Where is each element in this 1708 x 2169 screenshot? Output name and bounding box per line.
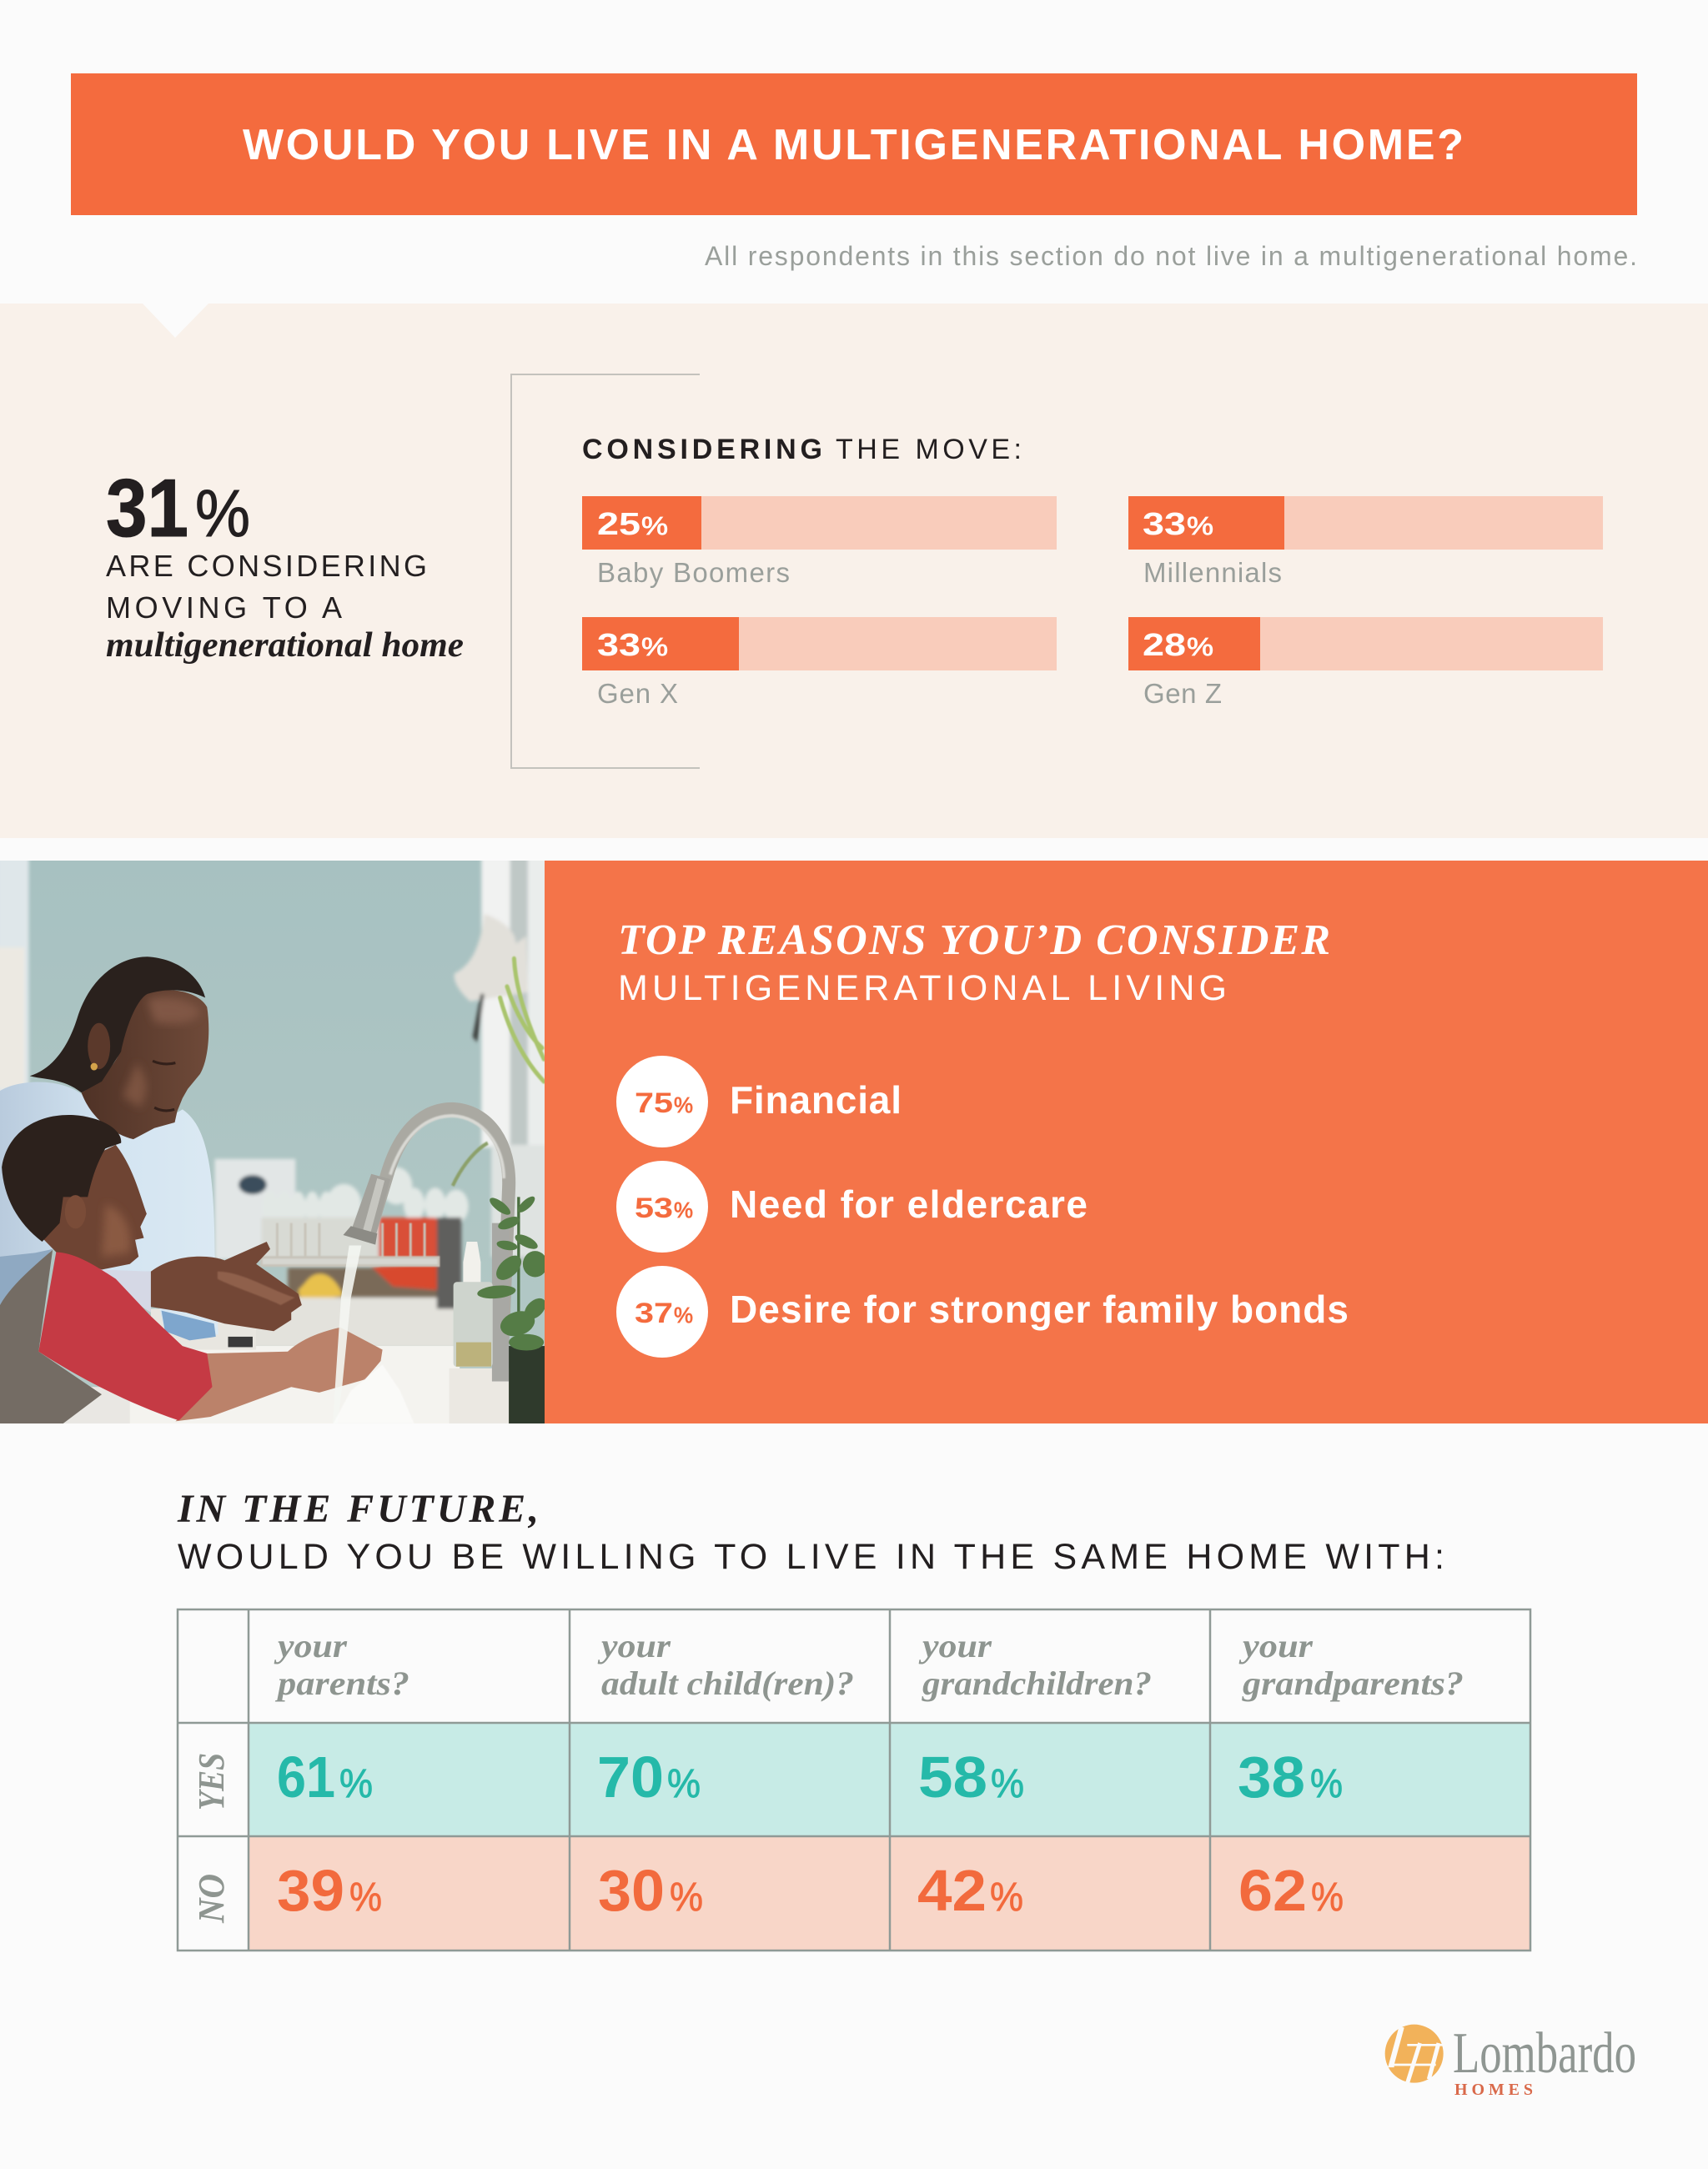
heading: considering the move: THE MOVE: [836,434,1022,465]
no values [277,1858,1344,1923]
column headers: grandchildren? [922,1664,1152,1702]
faucet [377,1102,515,1346]
no values: % [349,1875,382,1920]
bar: Gen Z 28%: % [1187,632,1213,661]
stat: 31 percent considering: 31 [106,462,188,554]
bar: Gen Z 28% [1128,617,1603,709]
logo: Lombardo Homes [1385,2021,1636,2099]
no values: % [1311,1875,1344,1920]
plant [477,1194,550,1350]
no values: 62 [1238,1858,1307,1923]
subtitle note: All respondents in this section do not live in a multigenerational home. [705,241,1637,271]
reason: financial: Financial [730,1078,902,1122]
photo: grandmother and boy washing hands at kitchen sink [0,861,545,1423]
bar: Gen Z 28%: Gen Z [1143,678,1222,709]
column headers: your [598,1627,671,1664]
yes values: 58 [918,1745,987,1810]
bar: Gen Z 28%: 28 [1143,628,1186,663]
bar: Baby Boomers 25% [582,496,1057,588]
reason: stronger family bonds: % [674,1303,693,1328]
bar: Millennials 33%: 33 [1143,507,1186,542]
heading: top reasons: MULTIGENERATIONAL LIVING [618,968,1227,1008]
heading: top reasons: TOP REASONS YOU’D CONSIDER [618,916,1330,964]
no values: 42 [917,1858,987,1923]
yes values: % [339,1762,373,1806]
bar: Gen X 33%: % [641,632,668,661]
heading: top reasons [618,916,1330,1008]
column headers: your [274,1627,347,1664]
panel: top reasons [545,861,1708,1423]
water [335,1246,362,1388]
column headers: parents? [275,1664,409,1702]
reason: stronger family bonds: Desire for stronger family bonds [730,1288,1349,1331]
boy's shirt [0,1250,102,1423]
reason: financial [616,1056,902,1147]
logo: Lombardo Homes: HOMES [1454,2081,1533,2099]
woman's head [82,990,208,1139]
stat: 31 percent considering: % [195,476,250,550]
bar: Millennials 33%: % [1187,511,1213,540]
table: willingness by relation [178,1609,1530,1951]
yes values [277,1745,1343,1810]
bar: Millennials 33% [1128,496,1603,588]
yes values: % [1310,1762,1343,1806]
column headers: your [1239,1627,1313,1664]
reason: need for eldercare: 53 [635,1192,673,1224]
icon: LH circle mark [1385,2025,1444,2084]
column headers: your [919,1627,992,1664]
reason: need for eldercare: % [674,1197,693,1223]
no values: 39 [277,1858,344,1923]
bar: Baby Boomers 25%: Baby Boomers [597,557,790,588]
title banner [71,73,1637,215]
reason: need for eldercare [616,1161,1088,1253]
heading: in the future: IN THE FUTURE, [177,1487,539,1531]
heading: considering the move: CONSIDERING [582,434,822,465]
bar: Millennials 33%: Millennials [1143,557,1282,588]
title banner: WOULD YOU LIVE IN A MULTIGENERATIONAL HOME? [243,121,1464,169]
bar: Baby Boomers 25%: % [641,511,668,540]
panel: considering the move [0,304,1708,838]
woman's hands [151,1242,302,1331]
bar: Gen X 33%: Gen X [597,678,678,709]
no values: 30 [598,1858,665,1923]
column headers: adult child(ren)? [601,1664,854,1702]
stat: 31 percent considering: multigenerational home [106,626,464,665]
woman's blouse [0,1082,219,1335]
boy's head [38,1145,147,1270]
logo: Lombardo Homes: Lombardo [1453,2021,1636,2086]
stat: 31 percent considering [106,462,464,665]
yes values: 61 [277,1745,335,1810]
yes values: % [991,1762,1024,1806]
bar: Gen X 33% [582,617,1057,709]
reason: need for eldercare: Need for eldercare [730,1182,1088,1226]
yes values: 70 [597,1745,664,1810]
boy's arm and hands [175,1328,383,1421]
yes values: 38 [1238,1745,1305,1810]
stat: 31 percent considering: MOVING TO A [106,590,342,625]
reason: stronger family bonds [616,1266,1349,1358]
no values: % [990,1875,1023,1920]
woman's lace sleeve [100,1270,151,1313]
no values: % [670,1875,703,1920]
row label: yes: YES [191,1753,232,1810]
stat: 31 percent considering: ARE CONSIDERING [106,549,427,583]
heading: in the future: WOULD YOU BE WILLING TO LIVE IN THE SAME HOME WITH: [178,1537,1444,1577]
column headers: grandparents? [1242,1664,1464,1702]
column headers [274,1627,1464,1702]
heading: in the future [177,1487,1444,1577]
row label: no: NO [191,1874,232,1924]
reason: financial: % [674,1092,693,1117]
bar: Baby Boomers 25%: 25 [597,507,640,542]
reason: financial: 75 [635,1087,673,1119]
bar: Gen X 33%: 33 [597,628,640,663]
heading: considering the move [582,434,1022,465]
reason: stronger family bonds: 37 [635,1298,673,1329]
yes values: % [667,1762,701,1806]
